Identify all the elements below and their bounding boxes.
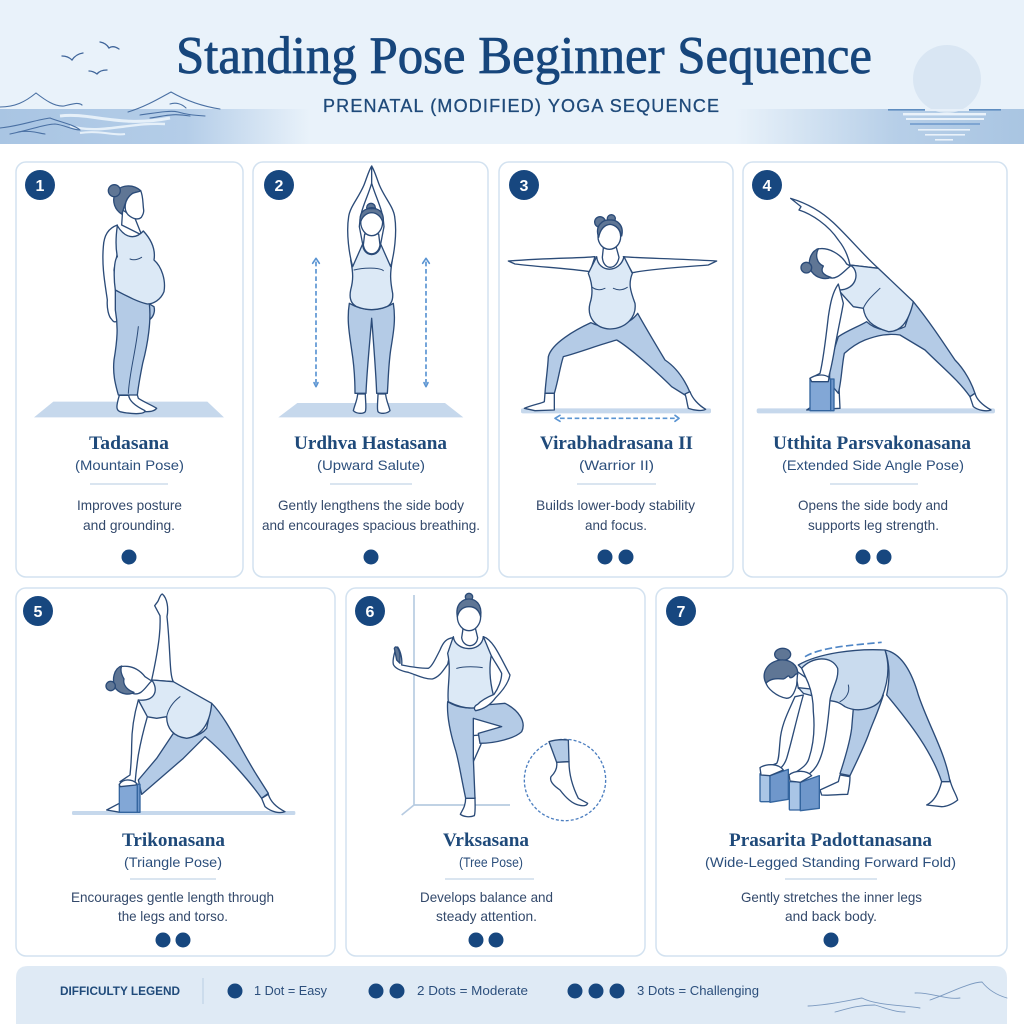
benefit text: Improves posture [77, 497, 182, 513]
benefit text [798, 497, 948, 533]
benefit text [77, 497, 182, 533]
legend item: moderate [368, 983, 528, 998]
step badge 3 [509, 170, 539, 200]
difficulty: two dots [598, 550, 634, 564]
difficulty: two dots [856, 550, 892, 564]
figure: warrior II [508, 215, 717, 421]
difficulty: two dots [468, 932, 504, 948]
step badge 5: 5 [34, 604, 43, 621]
difficulty: two dots [156, 932, 190, 948]
pose name: Trikonasana [122, 830, 225, 851]
benefit text: steady attention. [436, 908, 537, 924]
panel: pose 1 Tadasana [16, 162, 243, 577]
panel: pose 6 Vrksasana [346, 588, 645, 956]
step badge 4 [752, 170, 782, 200]
legend item: challenging: 3 Dots = Challenging [637, 983, 759, 998]
English name: (Tree Pose) [459, 854, 523, 870]
English name: (Mountain Pose) [75, 457, 184, 473]
legend item: challenging [568, 983, 759, 998]
English name: (Extended Side Angle Pose) [782, 457, 964, 473]
difficulty: one dot [364, 550, 378, 564]
icon: sun and reflection [888, 45, 1001, 141]
benefit text: Gently lengthens the side body [278, 497, 464, 513]
title: Standing Pose Beginner Sequence [176, 27, 872, 85]
benefit text: supports leg strength. [808, 517, 939, 533]
legend item: easy: 1 Dot = Easy [254, 983, 327, 998]
step badge 6: 6 [366, 604, 375, 621]
legend: difficulty [16, 966, 1007, 1024]
arrows: lengthen upward [313, 258, 429, 387]
panel: pose 2 Urdhva Hastasana [253, 162, 488, 577]
figure: triangle pose [72, 594, 295, 815]
benefit text [741, 889, 922, 924]
benefit text: Gently stretches the inner legs [741, 889, 922, 905]
left mountains and waves [0, 92, 220, 134]
figure: upward salute [278, 166, 463, 417]
step badge 7: 7 [677, 604, 686, 621]
benefit text: and grounding. [83, 517, 175, 533]
step badge 6 [355, 596, 385, 626]
step badge 4: 4 [763, 178, 772, 195]
pose name: Tadasana [89, 433, 170, 454]
benefit text [536, 497, 695, 533]
legend title: DIFFICULTY LEGEND [60, 984, 180, 998]
panel: pose 3 Virabhadrasana II [499, 162, 733, 577]
inset: foot placement detail [524, 739, 606, 821]
panel: pose 5 Trikonasana [16, 588, 335, 956]
step badge 5 [23, 596, 53, 626]
benefit text: Builds lower-body stability [536, 497, 695, 513]
decorative mountains [808, 982, 1007, 1012]
icon: birds [62, 42, 119, 74]
step badge 1 [25, 170, 55, 200]
difficulty: one dot [122, 550, 136, 564]
benefit text: and encourages spacious breathing. [262, 517, 480, 533]
benefit text: Encourages gentle length through [71, 889, 274, 905]
English name: (Wide-Legged Standing Forward Fold) [705, 854, 956, 870]
benefit text: and back body. [785, 908, 877, 924]
arrow: wide stance [555, 415, 679, 421]
legend item: moderate: 2 Dots = Moderate [417, 983, 528, 998]
benefit text: Opens the side body and [798, 497, 948, 513]
figure: wide-legged forward fold [760, 642, 958, 811]
benefit text: and focus. [585, 517, 647, 533]
pose name: Utthita Parsvakonasana [773, 433, 972, 454]
English name: (Warrior II) [579, 457, 654, 473]
pose name: Urdhva Hastasana [294, 433, 448, 454]
step badge 1: 1 [36, 178, 45, 195]
step badge 2 [264, 170, 294, 200]
English name: (Triangle Pose) [124, 854, 222, 870]
figure: mountain pose [34, 185, 224, 417]
step badge 3: 3 [520, 178, 529, 195]
pose name: Virabhadrasana II [540, 433, 693, 454]
arrow: flat back line [805, 642, 882, 657]
benefit text [71, 889, 274, 924]
step badge 7 [666, 596, 696, 626]
benefit text [420, 889, 553, 924]
English name: (Upward Salute) [317, 457, 425, 473]
panel: pose 7 Prasarita Padottanasana [656, 588, 1007, 956]
benefit text [262, 497, 480, 533]
header banner [0, 0, 1024, 144]
benefit text: Develops balance and [420, 889, 553, 905]
figure: extended side angle [757, 198, 995, 413]
panel: pose 4 Utthita Parsvakonasana [743, 162, 1007, 577]
difficulty: one dot [824, 932, 838, 948]
step badge 2: 2 [275, 178, 284, 195]
benefit text: the legs and torso. [118, 908, 228, 924]
subtitle: PRENATAL (MODIFIED) YOGA SEQUENCE [323, 96, 719, 116]
pose name: Vrksasana [443, 830, 529, 851]
pose name: Prasarita Padottanasana [729, 830, 933, 851]
figure: tree pose at wall [393, 593, 523, 817]
